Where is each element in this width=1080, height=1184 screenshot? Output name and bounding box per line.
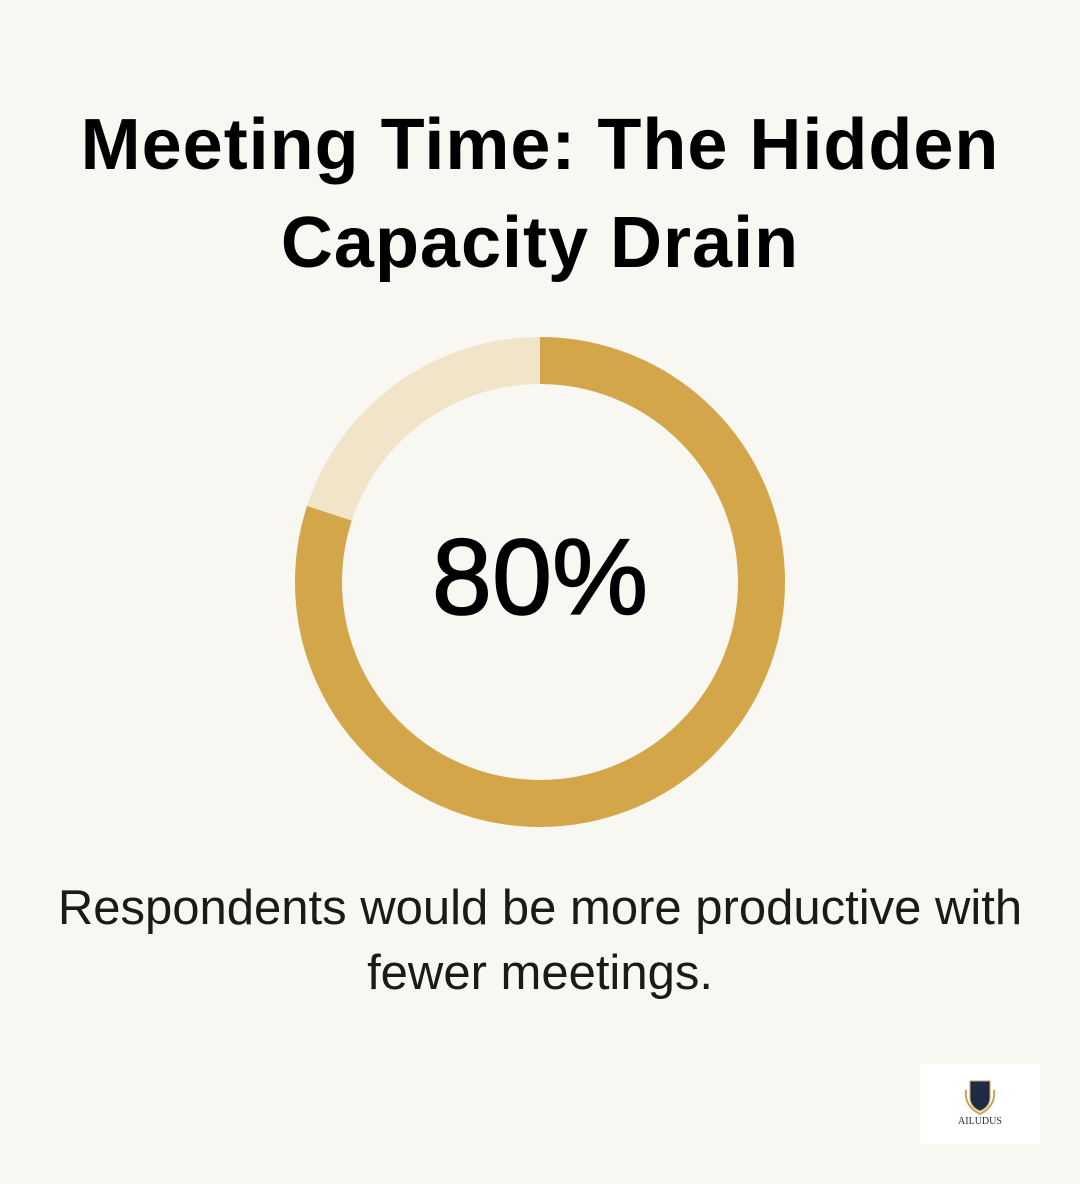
title: Meeting Time: The Hidden: [81, 105, 999, 185]
caption: [58, 881, 1022, 1000]
percentage label: 80%: [432, 516, 648, 637]
logo: AILUDUS: [958, 1116, 1002, 1127]
logo: [920, 1064, 1040, 1144]
title: Capacity Drain: [281, 203, 799, 283]
caption: Respondents would be more productive with: [58, 881, 1022, 935]
ring background: [318, 360, 762, 804]
ring value 80%: [318, 360, 762, 804]
caption: fewer meetings.: [367, 946, 713, 1000]
title: [81, 105, 999, 283]
